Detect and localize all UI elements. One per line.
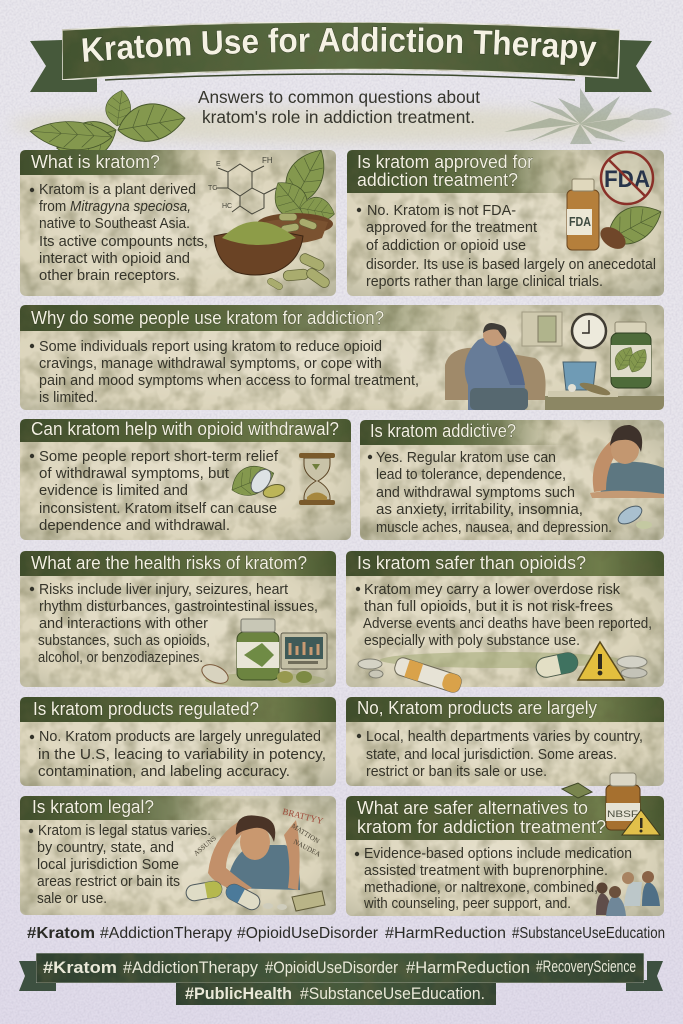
icon: FDA bottle, prohibition sign, leaf: FDA xyxy=(569,214,592,229)
icon: ampoule, capsule, warning sign xyxy=(358,642,647,694)
icon: faded leaves right xyxy=(504,88,672,144)
icon: distressed man and pill xyxy=(590,425,664,529)
icon: counseling group xyxy=(596,871,660,916)
text block: cravings, manage withdrawal symptoms, or cope with xyxy=(39,356,382,372)
text block: assisted treatment with buprenorphine. xyxy=(364,863,608,879)
text block: and interactions with other xyxy=(39,616,208,632)
footer banner with hashtags: #RecoveryScience xyxy=(536,958,636,976)
icon: stressed man, floating words, capsules, book: MATTION xyxy=(290,822,321,845)
icon: kratom bottle and warning sign overlapping panels: NBSF xyxy=(607,809,639,819)
text block: evidence is limited and xyxy=(39,483,188,499)
heading xyxy=(20,796,245,820)
panel: why do some people use kratom xyxy=(20,305,664,410)
icon: kratom bottle and warning sign overlapping panels xyxy=(562,773,660,835)
footer banner with hashtags: #SubstanceUseEducation. xyxy=(300,985,485,1003)
heading xyxy=(20,697,336,722)
text block xyxy=(357,729,643,780)
heading xyxy=(20,150,215,175)
text block: Evidence-based options include medication xyxy=(364,846,632,862)
text block: from Mitragyna speciosa, xyxy=(39,199,191,215)
icon: molecule: FH xyxy=(262,156,273,165)
text block: No. Kratom products are largely unregulated xyxy=(39,729,321,745)
icon: molecule: HC xyxy=(222,203,232,210)
panel: is kratom approved xyxy=(347,150,668,296)
text block xyxy=(30,582,318,666)
panel: is kratom addictive xyxy=(360,420,664,540)
icon: stressed man, floating words, capsules, book xyxy=(185,806,325,913)
heading: Why do some people use kratom for addiction? xyxy=(31,308,384,328)
heading: Is kratom products regulated? xyxy=(33,699,259,719)
text block: contamination, and labeling accuracy. xyxy=(38,764,290,780)
panel: is kratom safer than opioids xyxy=(346,551,664,694)
footer banner with hashtags: #OpioidUseDisorder xyxy=(265,959,398,977)
icon: FDA bottle, prohibition sign, leaf: FDA xyxy=(604,166,650,193)
hashtag line: #Kratom xyxy=(27,925,95,942)
heading: No, Kratom products are largely xyxy=(357,698,597,718)
panel: safer alternatives xyxy=(346,796,664,916)
text block: reports rather than large clinical trials. xyxy=(366,274,603,290)
text block xyxy=(29,823,211,907)
icon: molecule: E xyxy=(216,161,221,168)
text block xyxy=(368,450,612,536)
text block: Kratom mey carry a lower overdose risk xyxy=(364,582,621,598)
text block: muscle aches, nausea, and depression. xyxy=(376,520,612,536)
text block: local jurisdiction Some xyxy=(37,857,179,873)
footer banner with hashtags: #HarmReduction xyxy=(406,959,530,977)
heading xyxy=(346,796,664,840)
panel: what is kratom xyxy=(20,142,337,296)
text block: disorder. Its use is based largely on anecedotal xyxy=(366,257,656,273)
text block: interact with opioid and xyxy=(39,251,190,267)
text block xyxy=(30,182,208,284)
text block: of addiction or opioid use xyxy=(366,238,526,254)
text block: by country, state, and xyxy=(37,840,174,856)
icon: leaves, powder bowl and capsules xyxy=(214,142,337,291)
subtitle: kratom's role in addiction treatment. xyxy=(202,107,475,127)
text block: Kratom is legal status varies. xyxy=(38,823,211,839)
text block: and withdrawal symptoms such xyxy=(376,485,575,501)
text block: sale or use. xyxy=(37,891,107,907)
text block: Adverse events anci deaths have been reported, xyxy=(363,616,652,632)
icon: stressed man, floating words, capsules, book: BRATTYY xyxy=(282,806,325,826)
text block: lead to tolerance, dependence, xyxy=(376,467,566,483)
icon: molecule xyxy=(208,156,276,214)
text block xyxy=(30,339,419,406)
text block: than full opioids, but it is not risk-frees xyxy=(364,599,613,615)
text block: approved for the treatment xyxy=(366,220,537,236)
heading: What is kratom? xyxy=(31,152,160,172)
hashtag line: #OpioidUseDisorder xyxy=(237,925,378,942)
text block: Some people report short-term relief xyxy=(39,449,279,465)
heading: kratom for addiction treatment? xyxy=(357,817,606,837)
icon: man with head in hand, clock, jar xyxy=(445,312,664,410)
text block: is limited. xyxy=(39,390,98,406)
title banner xyxy=(30,22,652,92)
icon: supplement bottle, monitor, pills xyxy=(199,619,327,687)
text block: of withdrawal symptoms, but xyxy=(39,466,229,482)
panel: no, kratom products are largely xyxy=(346,697,664,786)
subtitle: Answers to common questions about xyxy=(198,87,480,107)
footer banner with hashtags: #AddictionTherapy xyxy=(123,959,259,977)
text block xyxy=(356,582,652,649)
hashtag line: #AddictionTherapy xyxy=(100,925,232,942)
text block: Risks include liver injury, seizures, heart xyxy=(39,582,288,598)
text block: native to Southeast Asia. xyxy=(39,216,190,232)
text block: rhythm disturbances, gastrointestinal issues, xyxy=(39,599,318,615)
text block: restrict or ban its sale or use. xyxy=(366,764,547,780)
heading: What are safer alternatives to xyxy=(357,798,588,818)
text block: dependence and withdrawal. xyxy=(39,518,230,534)
heading: What are the health risks of kratom? xyxy=(31,553,307,573)
text block: methadione, or naltrexone, combined, xyxy=(364,880,598,896)
text block xyxy=(357,203,656,290)
text block xyxy=(30,449,279,534)
heading xyxy=(20,305,500,331)
heading xyxy=(346,551,664,576)
text block: in the U.S, leacing to variability in potency, xyxy=(38,747,326,763)
hashtag line: #HarmReduction xyxy=(385,925,506,942)
footer banner with hashtags: #Kratom xyxy=(43,959,117,977)
icon: molecule: TC xyxy=(208,185,217,192)
text block: alcohol, or benzodiazepines. xyxy=(38,650,203,666)
text block: Some individuals report using kratom to reduce opioid xyxy=(39,339,382,355)
icon: hourglass with pills and leaf xyxy=(226,453,335,505)
text block: Kratom is a plant derived xyxy=(39,182,196,198)
panel: can kratom help with withdrawal xyxy=(20,419,351,540)
text block: substances, such as opioids, xyxy=(38,633,210,649)
heading: Is kratom safer than opioids? xyxy=(357,553,586,573)
footer banner with hashtags xyxy=(19,953,663,1005)
text block: Local, health departments varies by country, xyxy=(366,729,643,745)
heading: addiction treatment? xyxy=(357,170,518,190)
text block: with counseling, peer support, and. xyxy=(363,896,571,912)
panel: health risks xyxy=(20,551,336,687)
footer banner with hashtags: #PublicHealth xyxy=(185,985,292,1003)
text block: state, and local jurisdiction. Some areas. xyxy=(366,747,617,763)
heading xyxy=(360,420,570,445)
panel: is kratom legal xyxy=(20,796,336,915)
heading xyxy=(346,697,664,722)
heading: Is kratom addictive? xyxy=(370,421,516,441)
heading: Can kratom help with opioid withdrawal? xyxy=(31,419,339,439)
text block: Its active compounts ncts, xyxy=(39,234,208,250)
text block: Yes. Regular kratom use can xyxy=(376,450,556,466)
heading: Is kratom approved for xyxy=(357,152,533,172)
heading: Is kratom legal? xyxy=(32,797,154,817)
text block: especially with poly substance use. xyxy=(364,633,580,649)
icon: stressed man, floating words, capsules, book: ASSUNS xyxy=(192,834,218,858)
icon: kratom leaves left xyxy=(29,88,188,167)
text block: No. Kratom is not FDA- xyxy=(367,203,516,219)
text block: areas restrict or bain its xyxy=(37,874,180,890)
text block: inconsistent. Kratom itself can cause xyxy=(39,501,277,517)
text block: pain and mood symptoms when access to formal treatment, xyxy=(39,373,419,389)
text block xyxy=(355,846,632,912)
text block: as anxiety, irritability, insomnia, xyxy=(376,502,583,518)
icon: stressed man, floating words, capsules, book: NAUDEA xyxy=(292,838,322,859)
panel: products regulated xyxy=(20,697,336,786)
title: Kratom Use for Addiction Therapy xyxy=(82,26,597,66)
heading xyxy=(347,150,590,193)
icon: FDA bottle, prohibition sign, leaf xyxy=(567,152,668,253)
text block xyxy=(30,729,326,780)
hashtag line xyxy=(27,925,665,942)
subtitle xyxy=(10,87,670,143)
text block: other brain receptors. xyxy=(39,268,180,284)
